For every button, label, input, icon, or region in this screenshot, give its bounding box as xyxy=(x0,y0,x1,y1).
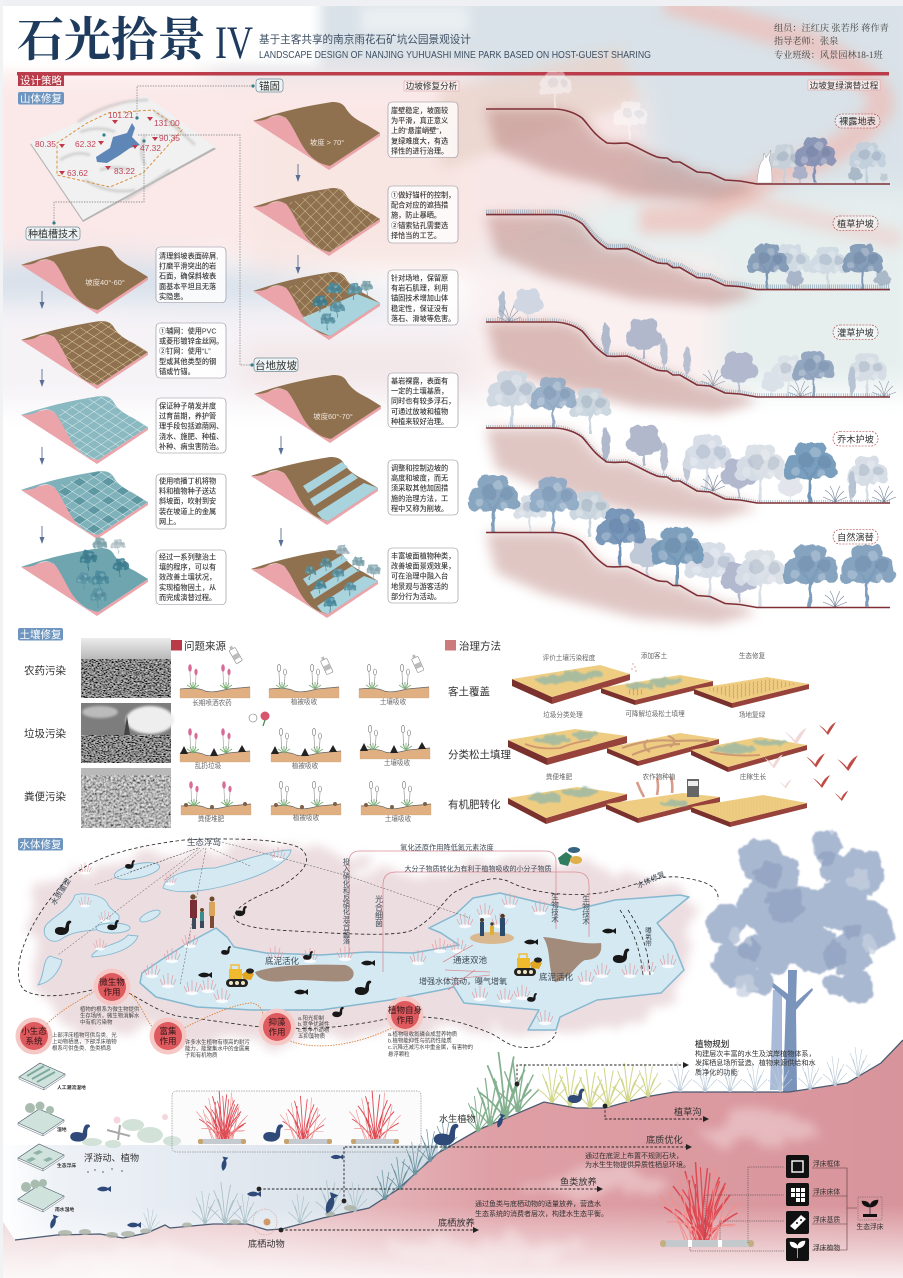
slabs row 3: organic fertilizer: 粪便堆肥 xyxy=(546,772,573,781)
water plan labels: 水体修复 xyxy=(635,868,667,890)
subtitle xyxy=(259,33,651,61)
benthic animal circle xyxy=(253,1209,277,1235)
wetland: artificial tidal: 人工潮流湿地 xyxy=(57,1084,86,1091)
note: plant self: 悬浮颗粒 xyxy=(388,1050,410,1058)
riverbank vegetation xyxy=(58,1047,870,1238)
text box: anchors: 择恰当的工艺。 xyxy=(391,231,441,240)
tag: anchoring: 锚固 xyxy=(259,80,280,92)
tag: anchoring xyxy=(251,79,283,92)
bed component labels: 浮床植物 xyxy=(813,1243,840,1252)
text box: keep texture: 落石、滑坡等危害。 xyxy=(391,314,455,323)
text box: keep texture: 有岩石肌理，利用 xyxy=(391,284,448,293)
label: plankton: 浮游动、植物 xyxy=(84,1152,139,1163)
text box: cliff: 崖壁稳定，坡面较 xyxy=(391,106,448,115)
bubble: microbial xyxy=(94,968,130,1006)
tag: terrace grading: 台地放坡 xyxy=(255,359,297,372)
photo: manure field xyxy=(81,768,171,828)
note: algae: a.阳光抑制 xyxy=(298,1014,324,1022)
wetland: marsh xyxy=(18,1102,67,1136)
diagrams: pesticide row: 长期喷洒农药 xyxy=(192,698,232,707)
stage label: trees xyxy=(833,432,878,446)
succession stage 3: shrubs xyxy=(486,289,896,414)
text box: bare rock: 同时也有较多浮石， xyxy=(391,397,455,406)
slope step 5: trees xyxy=(21,538,148,616)
wetland: marsh: 湿地 xyxy=(57,1126,67,1133)
note: accumulation: 许多水生植物有很高的耐污 xyxy=(185,1038,250,1046)
mountain site map: 47.32 xyxy=(140,143,161,153)
slope B3: terraces with trees xyxy=(251,545,380,618)
succession stage 1: bare ground xyxy=(486,71,890,201)
mountain site map: 62.32 xyxy=(75,139,96,149)
stage label: natural succession xyxy=(833,530,878,544)
stage label: grass xyxy=(833,216,878,230)
text box: cliff: 复绿难度大，有选 xyxy=(391,136,448,145)
bubble: accumulation xyxy=(150,1018,186,1054)
mountain site map xyxy=(30,95,216,222)
hikers xyxy=(190,894,215,929)
text box: grading: 须采取其他加固措 xyxy=(391,484,448,493)
water plan labels: 水质重塑 xyxy=(48,876,73,907)
team info xyxy=(774,22,889,60)
slope A2: netting xyxy=(253,188,380,256)
slabs row 3: organic fertilizer: 农作物种植 xyxy=(643,772,676,781)
diagrams: garbage row: 植被吸收 xyxy=(292,761,319,770)
water plan: sludge xyxy=(255,937,601,982)
row label: garbage: 垃圾污染 xyxy=(24,727,66,740)
pink process brackets xyxy=(349,851,589,990)
bubble: microbial: 微生物 xyxy=(99,977,125,987)
section tag: design strategy: 设计策略 xyxy=(20,74,62,87)
stage label: trees: 乔木护坡 xyxy=(837,434,874,444)
bulldozer left xyxy=(226,965,254,987)
subtitle: LANDSCAPE DESIGN OF NANJING YUHUASHI MINE PARK BASED ON HOST-GUEST SHARING xyxy=(259,49,651,61)
note: accumulation: 能力，能聚集水中的金属离 xyxy=(185,1045,250,1053)
slabs row 3: organic fertilizer xyxy=(508,772,807,827)
text box: seed care: 过育苗期，养护管 xyxy=(159,412,216,421)
water plan labels: 生物技术 xyxy=(550,892,560,924)
swans and water animals xyxy=(48,1089,584,1230)
bubble: plant self-action xyxy=(386,996,424,1034)
text box: planting richness: 部分行为活动。 xyxy=(391,592,441,601)
diagrams: manure row xyxy=(181,781,431,823)
text box: anchors: 施，防止暴晒。 xyxy=(391,211,441,220)
text box: bare rock: 种植来较好治理。 xyxy=(391,417,448,426)
water plan labels: 底泥活化 xyxy=(265,956,299,966)
big tree xyxy=(705,830,892,1092)
water plan labels: 生物技术 xyxy=(581,894,590,926)
text box: soil improvement xyxy=(156,550,226,604)
slope B1: 60 to 70 degrees: 坡度60°-70° xyxy=(313,412,353,421)
photo: pesticide field xyxy=(81,638,171,698)
photo: garbage heap xyxy=(81,703,174,763)
slope step 2: mesh xyxy=(21,321,148,389)
bubble: small ecosystem: 系统 xyxy=(25,1036,43,1046)
succession stage 5: natural succession xyxy=(468,475,895,624)
bulldozer right xyxy=(514,954,542,976)
text box: planting richness xyxy=(388,548,458,603)
note: plant self: c.沉降还减污水中重金属，有害物的 xyxy=(388,1043,473,1051)
label: aquatic plants: 水生植物 xyxy=(439,1113,476,1124)
watercolor wash behind water plan xyxy=(30,845,695,1040)
label: fish stocking: 鱼类放养 xyxy=(560,1176,597,1187)
stage label: shrubs: 灌草护坡 xyxy=(837,327,874,338)
label: plant planning: 质净化的功能 xyxy=(695,1067,738,1076)
bubble: algae inhibition: 抑藻 xyxy=(268,1017,286,1027)
icon: bed frame xyxy=(786,1155,809,1178)
diagrams: manure row: 植被吸收 xyxy=(293,813,320,822)
text box: bare rock xyxy=(388,373,458,428)
bubble: accumulation: 富集 xyxy=(159,1026,177,1036)
bed component labels: 浮床基质 xyxy=(813,1215,840,1224)
text box: grading: 程中又称为削坡。 xyxy=(391,504,448,513)
row label: pesticide: 农药污染 xyxy=(24,664,66,677)
text box: grading: 调整和控制边坡的 xyxy=(391,464,448,472)
text box: anchors: ②锚索钻孔需要选 xyxy=(391,221,448,230)
text box: planting richness: 改善坡面景观效果， xyxy=(391,562,455,571)
text box: grading: 高度和坡度，而无 xyxy=(391,474,448,483)
text box: grading: 施的治理方法，工 xyxy=(391,494,448,503)
heading: treatment methods: 治理方法 xyxy=(459,640,501,652)
diagrams: garbage row: 乱扔垃圾 xyxy=(195,761,222,770)
dashed leader lines from eco-island xyxy=(58,842,470,985)
note: small ecosystem: 根系可供鱼类、鱼类栖息 xyxy=(52,1044,112,1052)
diagrams: pesticide row: 植被吸收 xyxy=(291,697,318,706)
icon: substrate xyxy=(786,1211,809,1234)
text box: mesh: 或菱形镀锌金丝网。 xyxy=(159,337,223,346)
label: substrate optimization xyxy=(585,1134,690,1169)
header rule xyxy=(17,72,889,76)
bed component labels xyxy=(812,1159,857,1252)
tag: planting groove technique: 种植槽技术 xyxy=(28,228,78,240)
bubble: small ecosystem: 小生态 xyxy=(21,1026,47,1036)
orange dotted connectors xyxy=(45,990,392,1046)
label: plant planning xyxy=(695,1038,816,1076)
note: algae: c.竞争小动物 xyxy=(298,1026,330,1034)
row label: manure: 粪便污染 xyxy=(24,790,66,803)
wetland: artificial tidal xyxy=(19,1063,86,1091)
section tag: soil repair: 土壤修复 xyxy=(20,628,62,641)
water plan labels: 增强水体流动，曝气增氧 xyxy=(419,976,507,986)
heading: slope repair analysis: 边坡修复分析 xyxy=(406,80,458,91)
team info: 专业班级：风景园林18-1班 xyxy=(774,49,883,60)
slabs row 2: sorted fill: 垃圾分类处理 xyxy=(543,710,583,719)
text box: cliff xyxy=(388,102,458,158)
title: IV xyxy=(215,17,253,69)
note: microbes: 中有机污染物 xyxy=(80,1018,113,1026)
text box: grading xyxy=(388,460,458,515)
water plan labels: 大分子物质转化为有利于植物吸收的小分子物质 xyxy=(404,864,552,873)
diagrams: pesticide row xyxy=(180,645,429,707)
bubble: algae inhibition xyxy=(258,1008,296,1046)
heading: slope regreening succession: 边坡复绿演替过程 xyxy=(810,80,879,90)
slabs row 3: organic fertilizer: 庄稼生长 xyxy=(740,772,767,781)
text box: clearing xyxy=(156,247,226,302)
text box: clearing: 实隐患。 xyxy=(159,292,188,301)
floating bed box xyxy=(172,1091,421,1152)
slabs row 1: soil cover: 生态修复 xyxy=(739,651,766,660)
mountain site map: 63.62 xyxy=(67,168,88,178)
text box: seed care xyxy=(156,398,226,453)
subtitle: 基于主客共享的南京雨花石矿坑公园景观设计 xyxy=(259,33,471,46)
text box: spraying xyxy=(156,474,226,529)
text box: seed care: 浇水、施肥、种植、 xyxy=(159,432,223,441)
microbe icons xyxy=(558,847,582,866)
text box: keep texture: 稳定性，保证没有 xyxy=(391,304,448,313)
team info: 指导老师：张泉 xyxy=(774,35,838,46)
arrowheads xyxy=(257,1062,709,1233)
slope A1: cliff over 70 degrees: 坡度 > 70° xyxy=(310,138,344,147)
text box: cliff: 择性的进行治理。 xyxy=(391,146,448,155)
wetland: eco float xyxy=(18,1144,76,1171)
slabs row 2: sorted fill: 可降解垃圾松土填埋 xyxy=(625,709,685,718)
dashed boundaries xyxy=(18,839,718,1048)
text box: clearing: 清理斜坡表面碎屑, xyxy=(159,252,218,260)
slope step 1: clearing xyxy=(21,246,148,314)
water plan labels: 氧化还原作用降低氮元素浓度 xyxy=(400,843,494,852)
label: benthic stocking: 底栖放养 xyxy=(438,1217,475,1228)
treatment label: organic fertilizer: 有机肥转化 xyxy=(448,798,501,811)
dashed arrows xyxy=(259,1065,703,1230)
text box: spraying: 料和植物种子送达 xyxy=(159,487,216,496)
text box: spraying: 网上。 xyxy=(159,517,180,526)
succession stage 4: trees xyxy=(486,370,896,520)
text box: soil improvement: 实现植物固土，从 xyxy=(159,583,216,592)
note: microbes: 植物的根系为微生物提供 xyxy=(80,1005,140,1013)
text box: mesh: ②钉网：使用“L” xyxy=(159,347,211,356)
label: plant planning: 发挥栖息场所营造、植物来源供给和水 xyxy=(695,1058,816,1067)
icon: eco floating bed: 生态浮床 xyxy=(856,1222,884,1231)
text box: anchors: ①做好锚杆的控制， xyxy=(391,190,455,200)
diagrams: pesticide row: 土壤吸收 xyxy=(380,697,407,706)
slabs row 1: soil cover xyxy=(512,651,809,708)
text box: spraying: 斜坡面，吹射到安 xyxy=(159,497,216,506)
text box: bare rock: 可通过放坡和植物 xyxy=(391,407,448,416)
mountain site map: 90.35 xyxy=(159,133,180,143)
section: terrain and water xyxy=(3,1040,903,1278)
water plan labels: 通速双池 xyxy=(453,955,487,965)
down arrows left column xyxy=(40,291,44,544)
diagrams: garbage row xyxy=(180,712,430,770)
diagrams: manure row: 土壤吸收 xyxy=(385,814,412,823)
slabs row 1: soil cover: 添加客土 xyxy=(641,651,668,660)
bubble: plant self-action: 作用 xyxy=(396,1015,414,1025)
birds xyxy=(764,722,858,801)
section tag: mountain repair: 山体修复 xyxy=(20,92,62,105)
bubble: microbial: 作用 xyxy=(103,987,121,997)
slabs row 2: sorted fill: 场地复绿 xyxy=(739,710,766,719)
note: accumulation: 子和有机物质 xyxy=(185,1051,218,1059)
diagrams: manure row: 粪便堆肥 xyxy=(198,814,225,823)
water plan: small ponds xyxy=(38,850,291,985)
text box: mesh xyxy=(156,323,226,378)
label: substrate optimization: 底质优化 xyxy=(646,1134,683,1145)
text box: clearing: 打磨平滑突出的岩 xyxy=(159,262,216,271)
text box: soil improvement: 而完成演替过程。 xyxy=(159,593,216,602)
water plan labels xyxy=(48,837,667,986)
tag: planting groove technique xyxy=(26,221,80,240)
bubble: plant self-action: 植物自身 xyxy=(388,1005,422,1015)
bubble: small ecosystem xyxy=(16,1018,52,1054)
wetland: eco float: 生态浮床 xyxy=(57,1162,76,1169)
bubble: algae inhibition: 作用 xyxy=(268,1027,286,1037)
label: substrate optimization: 为水生生物提供异质性栖息环境。 xyxy=(585,1160,690,1169)
text box: anchors xyxy=(388,186,458,243)
lily pads xyxy=(82,1114,181,1148)
slope step 4: spraying xyxy=(21,471,148,539)
wetland: rain garden: 雨水湿地 xyxy=(55,1206,74,1213)
water plan labels: 生态浮岛 xyxy=(187,837,221,847)
icon: plant xyxy=(786,1238,809,1261)
slope step 1: clearing: 坡度40°-60° xyxy=(85,278,125,287)
mountain site map: 101.21 xyxy=(108,110,134,120)
water plan: main lake xyxy=(140,893,689,1030)
diagrams: garbage row: 土壤吸收 xyxy=(384,758,411,767)
mountain site map: 80.35 xyxy=(35,139,56,149)
note: plant self: a.植物吸收氮磷合成营养物质 xyxy=(388,1030,458,1038)
connectors xyxy=(54,86,253,365)
label: fish stocking xyxy=(475,1176,608,1218)
text box: mesh: ①辅网：使用PVC xyxy=(159,326,217,336)
slabs row 2: sorted fill xyxy=(508,709,807,772)
note: microbes: 生存场所，微生物消解水 xyxy=(80,1012,140,1020)
text box: clearing: 面基本平坦且无落 xyxy=(159,282,216,291)
water plan labels: 曝氧带 xyxy=(644,927,652,948)
water plan labels: 光合细菌 xyxy=(374,894,384,928)
note: small ecosystem: 上动物栖息，下部浮床植物 xyxy=(52,1038,117,1046)
text box: keep texture xyxy=(388,270,458,325)
note: algae: 五抑藻物质 xyxy=(298,1032,326,1040)
text box: clearing: 石面，确保斜坡表 xyxy=(159,272,216,281)
stage label: grass: 植草护坡 xyxy=(837,218,874,229)
text box: mesh: 锚或竹锚。 xyxy=(159,367,195,376)
team info: 组员：汪红庆 张若彤 蒋作青 xyxy=(774,22,889,33)
note: algae: b.竞争优越性 xyxy=(298,1020,330,1028)
text box: planting richness: 丰富坡面植物种类， xyxy=(391,552,455,560)
text box: mesh: 型或其他类型的钢 xyxy=(159,357,216,366)
water plan labels: 底泥活化 xyxy=(539,972,573,982)
text box: cliff: 为平滑，真正意义 xyxy=(391,116,448,125)
label: plant planning: 植物规划 xyxy=(695,1038,729,1049)
floating bed section xyxy=(660,1162,784,1251)
text box: soil improvement: 壤的程序，可以有 xyxy=(159,563,216,572)
stage label: shrubs xyxy=(833,325,878,340)
plankton specks xyxy=(87,1168,123,1173)
label: grass swale: 植草沟 xyxy=(674,1106,702,1117)
text box: bare rock: 基岩裸露，表面有 xyxy=(391,376,448,386)
text box: seed care: 理手段包括遮荫网、 xyxy=(159,422,223,431)
stage label: bare ground: 裸露地表 xyxy=(839,116,876,126)
note: small ecosystem: 上部浮床植物可供鸟类、光 xyxy=(52,1031,117,1039)
down arrows right column xyxy=(278,164,300,547)
water plan labels: 投入硝化和反硝化混合菌落 xyxy=(342,857,352,946)
stage label: natural succession: 自然演替 xyxy=(837,532,874,542)
bed component labels: 浮床床体 xyxy=(813,1187,840,1196)
heading: problem sources: 问题来源 xyxy=(184,640,226,652)
slope step 3: seeded xyxy=(21,396,148,464)
text box: planting richness: 可在治理中融入台 xyxy=(391,572,448,581)
icon: eco floating bed xyxy=(856,1197,884,1231)
water plan: animals xyxy=(55,860,629,1017)
mountain site map: 83.22 xyxy=(114,166,135,176)
bed component labels: 浮床框体 xyxy=(813,1159,840,1168)
title: 石光拾景 xyxy=(17,15,206,67)
text box: soil improvement: 效改善土壤状况， xyxy=(159,573,216,582)
heading: problem sources xyxy=(171,640,226,652)
label: benthic animals: 底栖动物 xyxy=(248,1238,285,1249)
text box: spraying: 使用喷播丁机将物 xyxy=(159,476,216,486)
mountain site map: 131.00 xyxy=(154,118,180,128)
wetland: rain garden xyxy=(18,1179,74,1213)
slabs row 1: soil cover: 评价土壤污染程度 xyxy=(543,653,596,662)
label: fish stocking: 生态系统的消费者层次，构建水生态平衡。 xyxy=(475,1209,608,1218)
text box: cliff: 上的“悬崖峭壁”， xyxy=(391,126,446,135)
text box: bare rock: 一定的土壤基质， xyxy=(391,387,448,396)
section tag: water repair: 水体修复 xyxy=(20,838,62,851)
text box: keep texture: 锚固技术增加山体 xyxy=(391,294,448,303)
text box: anchors: 配合对应的遮挡措 xyxy=(391,201,448,210)
text box: keep texture: 针对场地，保留原 xyxy=(391,274,448,282)
slope B2: terraces xyxy=(251,457,378,525)
label: substrate optimization: 通过在底泥上布置不规则石块， xyxy=(585,1151,683,1160)
slope B1: 60 to 70 degrees xyxy=(254,375,381,443)
stage label: bare ground xyxy=(835,114,880,128)
note: plant self: b.植物能抑性与抗药性能质 xyxy=(388,1037,452,1045)
text box: planting richness: 地景观与游客活的 xyxy=(391,582,448,591)
label: plant planning: 构建层次丰富的水生及滨岸植物体系， xyxy=(695,1049,816,1058)
succession stage 2: grass xyxy=(486,212,891,307)
text box: seed care: 补种、病虫害防治。 xyxy=(159,442,223,451)
slope A3: anchored with trees xyxy=(253,272,380,340)
water plan: reeds xyxy=(79,847,676,1025)
bubble: accumulation: 作用 xyxy=(159,1036,177,1046)
text box: seed care: 保证种子萌发并度 xyxy=(159,402,216,410)
heading: treatment methods xyxy=(445,640,501,652)
label: fish stocking: 通过鱼类与底栖动物的适量放养，营造水 xyxy=(475,1199,601,1208)
treatment label: sorted fill: 分类松土填理 xyxy=(448,748,511,761)
treatment label: soil cover: 客土覆盖 xyxy=(448,685,490,698)
slope A1: cliff over 70 degrees xyxy=(253,102,380,170)
text box: spraying: 装在坡道上的金属 xyxy=(159,507,216,516)
family on island xyxy=(470,914,514,944)
icon: bed body xyxy=(786,1183,809,1206)
text box: soil improvement: 经过一系列整治土 xyxy=(159,552,216,562)
